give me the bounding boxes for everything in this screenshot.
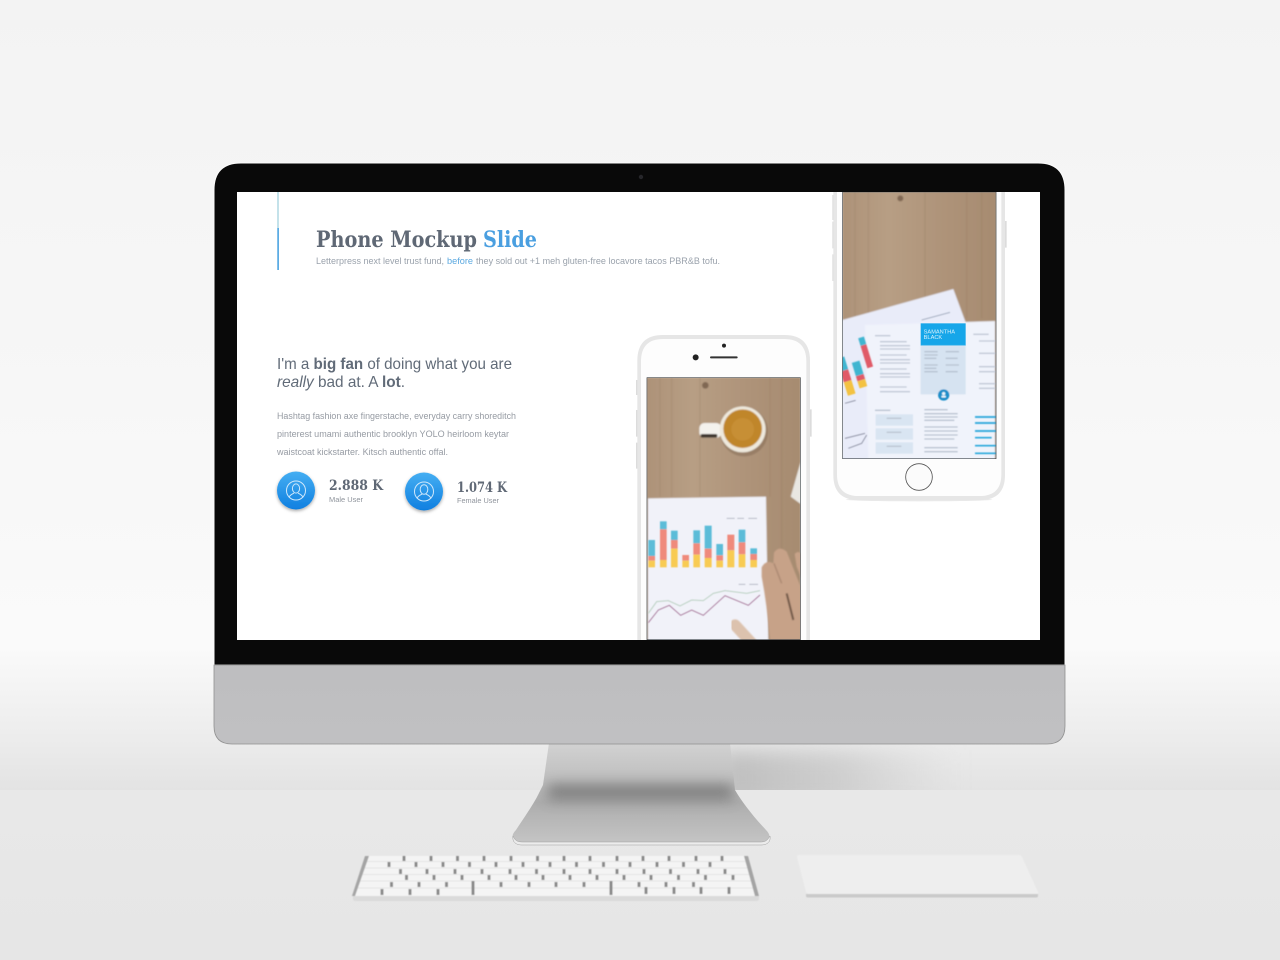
subtitle: they sold out +1 meh gluten-free locavore tacos PBR&B tofu. — [476, 256, 720, 267]
lead statement: I'm a big fan of doing what you are — [277, 356, 512, 373]
body paragraph: Hashtag fashion axe fingerstache, everyday carry shoreditch — [277, 411, 516, 421]
resume sheet blue header: BLACK — [924, 335, 942, 341]
phone mockup: resume photo — [832, 185, 1007, 501]
slide screen — [237, 185, 1040, 650]
icon: female user — [405, 472, 443, 510]
lead statement — [277, 356, 512, 391]
body paragraph: waistcoat kickstarter. Kitsch authentic offal. — [276, 447, 448, 457]
title: Slide — [483, 227, 537, 253]
stat: female user — [458, 482, 508, 503]
phone screen photo — [833, 192, 996, 459]
desk surface — [0, 790, 1280, 960]
slide background — [237, 192, 1040, 640]
webcam — [639, 175, 643, 179]
icon: male user — [277, 472, 315, 510]
heading accent line — [277, 192, 279, 270]
monitor chin — [214, 665, 1065, 744]
monitor — [214, 163, 1065, 744]
body paragraph — [276, 411, 516, 457]
line chart — [648, 518, 760, 623]
body paragraph: pinterest umami authentic brooklyn YOLO heirloom keytar — [277, 429, 509, 439]
resume sheet details — [845, 312, 996, 454]
resume sheet blue header: SAMANTHA — [924, 329, 955, 335]
phone body — [636, 335, 812, 650]
subtitle — [316, 258, 720, 266]
stat: male user: Male User — [329, 495, 363, 504]
stat: male user — [330, 480, 384, 502]
keyboard — [352, 856, 759, 901]
subtitle: before — [447, 256, 473, 267]
lead statement: really bad at. A lot. — [277, 374, 405, 391]
phone mockup: chart photo — [636, 335, 812, 650]
bar chart — [648, 521, 757, 567]
stat: male user: 2.888 K — [329, 478, 384, 494]
stat: female user: 1.074 K — [457, 480, 508, 496]
phone screen photo — [647, 377, 801, 645]
monitor stand — [513, 743, 770, 845]
angled chart bars — [842, 336, 874, 396]
resume sheet blue header — [921, 323, 966, 346]
trackpad — [797, 855, 1038, 898]
stat: female user: Female User — [457, 496, 499, 505]
subtitle: Letterpress next level trust fund, — [316, 256, 444, 267]
hand — [735, 549, 801, 645]
wall shadow behind stand — [730, 744, 908, 790]
monitor bezel — [214, 163, 1065, 665]
phone body — [832, 185, 1007, 501]
title: Phone Mockup — [316, 227, 477, 253]
